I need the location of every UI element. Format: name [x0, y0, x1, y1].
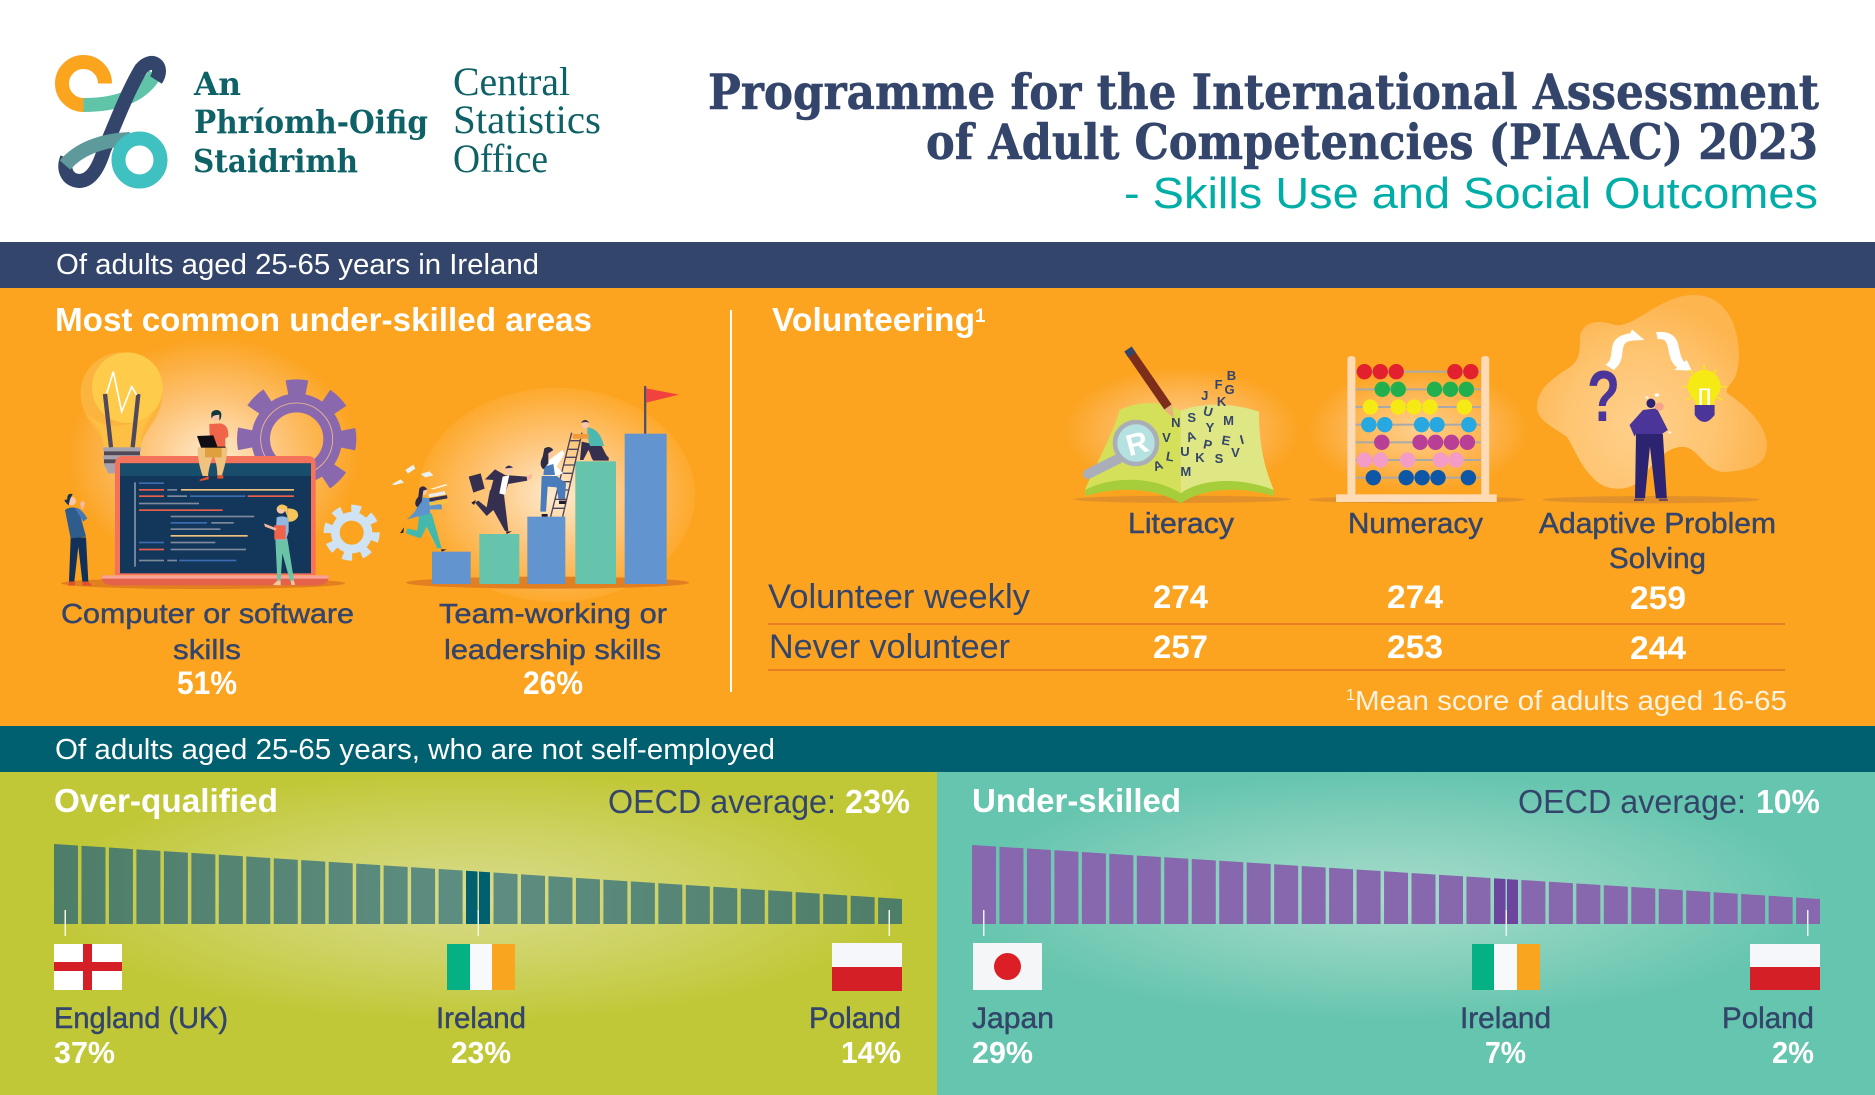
label: computer or software skills 51%: Computer or software — [61, 598, 354, 629]
OECD average 10%: OECD average: — [1518, 783, 1746, 820]
table row: volunteer weekly: 274 — [1387, 579, 1443, 615]
floating letters: G — [1225, 382, 1235, 397]
title: - Skills Use and Social Outcomes — [1124, 169, 1818, 218]
label: Japan 29%: Japan — [972, 1002, 1054, 1035]
table row: volunteer weekly: Volunteer weekly — [768, 578, 1030, 616]
icon: red flag — [644, 386, 679, 434]
label: England 37%: 37% — [54, 1035, 115, 1070]
illustration: abacus — [1306, 356, 1530, 503]
illustration: adaptive problem solving — [1537, 295, 1767, 503]
heading: volunteering: Volunteering — [772, 301, 975, 338]
band: adults in Ireland: Of adults aged 25-65 years in Ireland — [56, 249, 539, 281]
band: not self-employed: Of adults aged 25-65 years, who are not self-employed — [55, 734, 775, 766]
flag: England — [54, 944, 122, 990]
label: Poland 2%: Poland — [1722, 1002, 1814, 1035]
header background — [0, 0, 1875, 242]
icon: logo knot — [62, 62, 160, 182]
table: column headers: Solving — [1609, 543, 1706, 575]
OECD average 23%: 23% — [845, 783, 910, 820]
table: column headers: Literacy — [1128, 508, 1235, 540]
woman on ladder — [540, 447, 566, 517]
label: Japan 29%: 29% — [972, 1035, 1033, 1070]
table row: volunteer weekly: 274 — [1153, 579, 1208, 615]
logo text: English name — [453, 59, 601, 181]
icon: light bulb — [1683, 365, 1727, 422]
logo text: English name: Statistics — [453, 97, 601, 142]
logo text: Irish name: An — [193, 65, 241, 103]
label: computer or software skills 51%: 51% — [177, 665, 237, 701]
label: computer or software skills 51%: skills — [173, 634, 241, 665]
floating letters: B — [1227, 368, 1236, 383]
label: Poland 14%: Poland — [809, 1002, 901, 1035]
panel: orange skills and volunteering — [0, 288, 1875, 726]
floating letters: J — [1201, 388, 1208, 403]
label: team-working or leadership skills 26%: leadership skills — [444, 634, 661, 665]
logo: Central Statistics Office — [62, 59, 601, 182]
heading: under-skilled: Under-skilled — [972, 782, 1181, 819]
panel: under-skilled — [937, 772, 1875, 1095]
ladder — [551, 433, 582, 517]
label: team-working or leadership skills 26%: 26% — [523, 665, 583, 701]
label: Poland 14% — [809, 1002, 901, 1070]
label: team-working or leadership skills 26% — [439, 598, 667, 701]
bar chart: under-skilled by country — [972, 840, 1820, 936]
laptop with code — [102, 456, 329, 585]
table row: never volunteer: Never volunteer — [769, 628, 1010, 666]
label: Ireland 23%: Ireland — [436, 1002, 526, 1035]
flag: Poland — [1750, 944, 1820, 990]
logo text: Irish name — [193, 65, 428, 180]
floating letters: K — [1195, 450, 1205, 465]
table row: never volunteer: 257 — [1153, 629, 1208, 665]
table: column headers: Adaptive Problem — [1539, 508, 1776, 540]
divider — [730, 310, 732, 692]
floating letters: P — [1202, 436, 1214, 453]
logo text: Irish name: Phríomh-Oifig — [194, 103, 428, 141]
floating letters: V — [1162, 430, 1171, 445]
floating letters: N — [1171, 415, 1180, 430]
man looking at laptop — [64, 494, 92, 586]
staircase bars — [432, 434, 667, 584]
floating letters: S — [1187, 410, 1196, 425]
table row: volunteer weekly: 259 — [1630, 580, 1686, 616]
flying papers — [392, 465, 447, 489]
floating letters: L — [1165, 448, 1175, 465]
label: Ireland 7% — [1460, 1002, 1551, 1070]
logo text: English name: Central — [453, 59, 570, 104]
panel: over-qualified — [0, 772, 937, 1095]
table: column headers: Numeracy — [1348, 508, 1483, 540]
heading: over-qualified: Over-qualified — [54, 782, 278, 819]
floating letters: S — [1215, 451, 1224, 466]
label: England 37% — [54, 1002, 228, 1070]
running man with briefcase — [469, 466, 532, 534]
band: not self-employed — [0, 726, 1875, 772]
person on top of the bar — [573, 420, 609, 461]
icon: pencil — [1128, 349, 1174, 418]
floating letters: F — [1215, 377, 1223, 392]
label: Poland 2% — [1722, 1002, 1814, 1070]
woman presenting — [264, 505, 298, 585]
icon: magnifying glass: R — [1122, 425, 1152, 463]
band: adults in Ireland — [0, 242, 1875, 288]
flag: Ireland — [447, 944, 515, 990]
floating letters: U — [1180, 444, 1190, 459]
logo text: Irish name: Staidrimh — [193, 142, 358, 180]
label: Ireland 23%: 23% — [451, 1035, 511, 1070]
floating letters: E — [1221, 432, 1232, 449]
flag: Japan — [973, 943, 1042, 990]
label: Japan 29% — [972, 1002, 1054, 1070]
table row: volunteer weekly — [768, 578, 1686, 616]
floating letters — [1151, 368, 1246, 479]
table row: never volunteer — [769, 628, 1686, 666]
footnote: 1 — [1346, 687, 1355, 704]
floating letters: Y — [1206, 420, 1215, 435]
label: computer or software skills 51% — [61, 598, 354, 701]
label: England 37%: England (UK) — [54, 1002, 228, 1035]
icon: magnifying glass — [1088, 422, 1157, 474]
heading: volunteering: 1 — [975, 306, 986, 327]
man thinking — [1630, 393, 1671, 501]
label: Poland 2%: 2% — [1772, 1035, 1814, 1070]
floating letters: A — [1184, 428, 1198, 445]
icon: large purple gear — [244, 387, 349, 491]
icon: arrows — [1610, 336, 1684, 367]
floating letters: I — [1238, 432, 1246, 447]
floating letters: M — [1223, 413, 1234, 428]
heading: most common under-skilled areas: Most common under-skilled areas — [55, 301, 592, 338]
label: Ireland 7%: 7% — [1485, 1035, 1526, 1070]
table row: never volunteer: 244 — [1630, 630, 1686, 666]
illustration: team-working or leadership skills — [392, 386, 695, 602]
OECD average 10%: 10% — [1756, 783, 1820, 820]
floating letters: K — [1217, 394, 1227, 409]
label: Poland 14%: 14% — [841, 1035, 901, 1070]
floating letters: A — [1151, 457, 1165, 474]
woman carrying books — [392, 465, 448, 552]
floating letters: M — [1180, 464, 1191, 479]
label: team-working or leadership skills 26%: Team-working or — [439, 598, 667, 629]
floating letters: U — [1202, 403, 1215, 420]
person sitting on laptop — [197, 410, 228, 481]
floating letters: V — [1231, 445, 1240, 460]
flag: Poland — [832, 943, 902, 991]
icon: question mark: ? — [1587, 357, 1620, 437]
footnote: Mean score of adults aged 16-65 — [1355, 685, 1787, 716]
icon: small blue gear — [324, 505, 379, 560]
label: Ireland 7%: Ireland — [1460, 1002, 1551, 1035]
logo text: English name: Office — [453, 136, 548, 181]
illustration: computer or software skills — [61, 337, 379, 589]
OECD average 23%: OECD average: — [608, 783, 836, 820]
bar chart: over-qualified by country — [54, 840, 902, 936]
table row: never volunteer: 253 — [1387, 629, 1443, 665]
illustration: literacy book — [1062, 349, 1301, 503]
title — [708, 63, 1819, 218]
label: Ireland 23% — [436, 1002, 526, 1070]
table: column headers — [1128, 508, 1776, 575]
flag: Ireland — [1472, 944, 1540, 990]
